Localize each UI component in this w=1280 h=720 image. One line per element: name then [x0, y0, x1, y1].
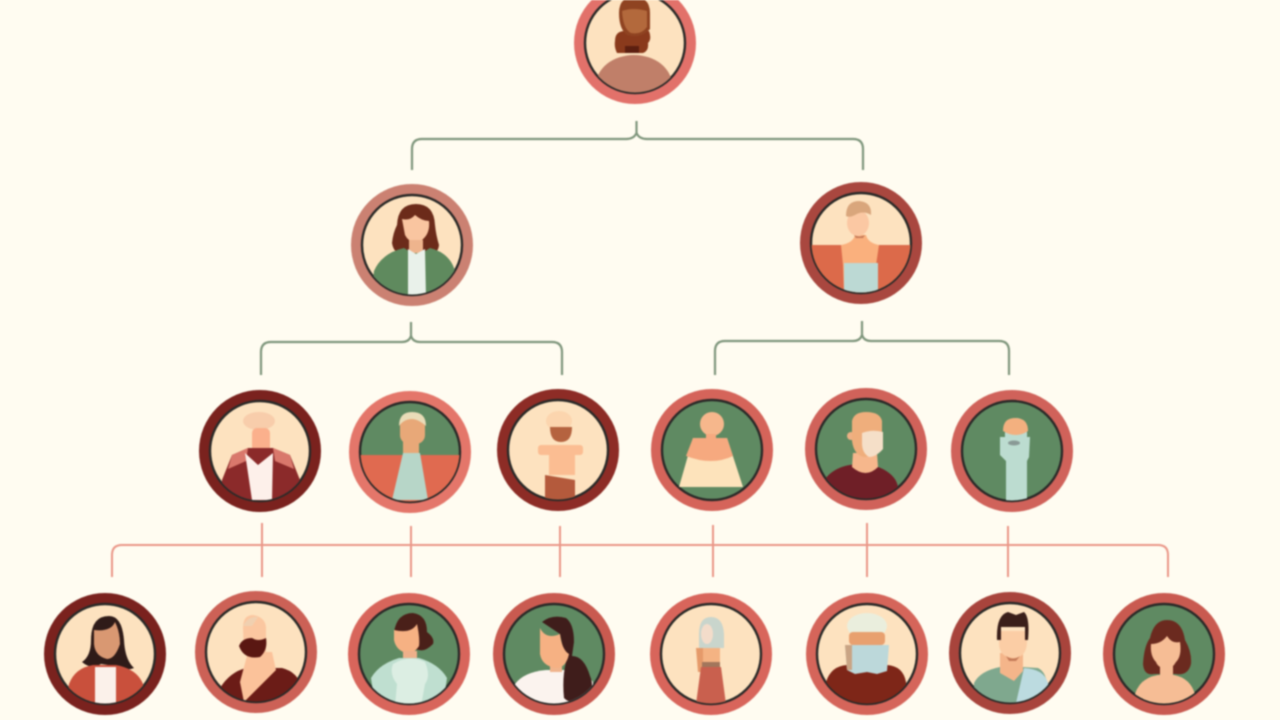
connector: left parent to three children — [261, 322, 562, 375]
portrait: figure with pale veil and red skirt — [650, 593, 772, 715]
connector: right parent to three children — [715, 321, 1009, 375]
portrait: white bearded man in maroon — [805, 388, 927, 514]
portrait: mint robed figure — [951, 390, 1073, 512]
portrait: man in maroon jacket — [199, 390, 321, 512]
portrait: figure in cream trapezoid — [651, 389, 773, 511]
portrait: woman with bob haircut — [1103, 593, 1225, 715]
portrait: man with split background — [800, 182, 922, 304]
portrait: root person with bun — [574, 0, 696, 115]
portrait: woman in green jacket — [351, 184, 473, 306]
portrait: woman in mint blouse — [348, 593, 470, 715]
portrait: young man with dark hair — [949, 592, 1071, 714]
connector: bottom row bus — [112, 523, 1168, 577]
portrait: older person on green and red — [349, 391, 471, 513]
portrait: woman with ponytail — [493, 593, 615, 715]
portrait: bearded figure with crossed arms — [497, 389, 619, 511]
portrait: bald man with dark beard — [195, 591, 317, 713]
connector: root to generation two — [412, 121, 863, 170]
portrait: woman with long dark hair — [44, 593, 166, 715]
portrait: old man with mint beard — [806, 593, 928, 715]
